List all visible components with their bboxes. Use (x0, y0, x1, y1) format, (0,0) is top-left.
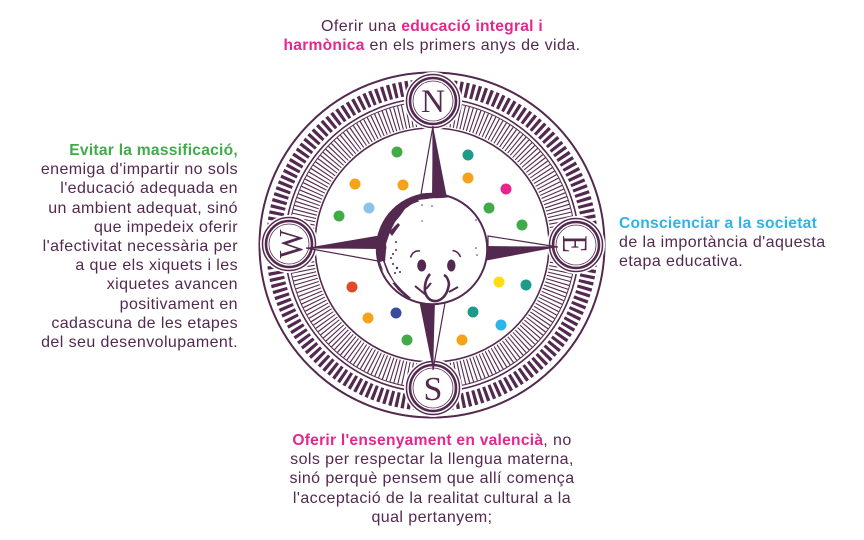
coloured dots (334, 146, 532, 346)
text: west: xiquetes avancen (107, 276, 238, 293)
text: north (284, 18, 580, 54)
text: south: sinó perquè pensem que allí comença (289, 470, 575, 487)
star points (306, 126, 558, 370)
compass rings (260, 72, 604, 418)
text: north: Oferir una educació integral i (321, 18, 543, 35)
text: west: del seu desenvolupament. (41, 334, 238, 351)
text: east (619, 215, 826, 270)
text: west: a que els xiquets i les (75, 257, 238, 274)
text: west: Evitar la massificació, (69, 142, 238, 159)
text: south: sols per respectar la llengua materna, (290, 451, 574, 468)
text: west: un ambient adequat, sinó (48, 200, 238, 217)
medallion E: E (554, 235, 594, 253)
medallion E (547, 216, 605, 274)
medallion S (404, 359, 462, 417)
text: west: enemiga d'impartir no sols (41, 161, 238, 178)
text: south: Oferir l'ensenyament en valencià, no (292, 432, 572, 449)
globe with face (376, 193, 487, 304)
medallion W: W (272, 229, 309, 258)
text: east: Conscienciar a la societat (619, 215, 817, 232)
text: west: l'educació adequada en (60, 180, 238, 197)
text: south: l'acceptació de la realitat cultural a la (293, 490, 571, 507)
medallion N: N (421, 84, 445, 120)
text: east: de la importància d'aquesta (619, 234, 826, 251)
medallion S: S (424, 371, 442, 408)
text: west: cadascuna de les etapes (51, 315, 238, 332)
text: south: qual pertanyem; (371, 509, 493, 526)
text: west: positivament en (120, 296, 238, 313)
text: west: que impedeix oferir (94, 219, 238, 236)
worn texture (380, 198, 436, 283)
medallion W (260, 215, 318, 273)
text: north: harmònica en els primers anys de vida. (284, 37, 580, 54)
face (410, 250, 460, 301)
medallion N (404, 72, 462, 130)
text: west: l'afectivitat necessària per (43, 238, 238, 255)
dark crescent (376, 193, 452, 299)
text: west (41, 142, 238, 351)
text: east: etapa educativa. (619, 253, 743, 270)
text: south (289, 432, 575, 526)
